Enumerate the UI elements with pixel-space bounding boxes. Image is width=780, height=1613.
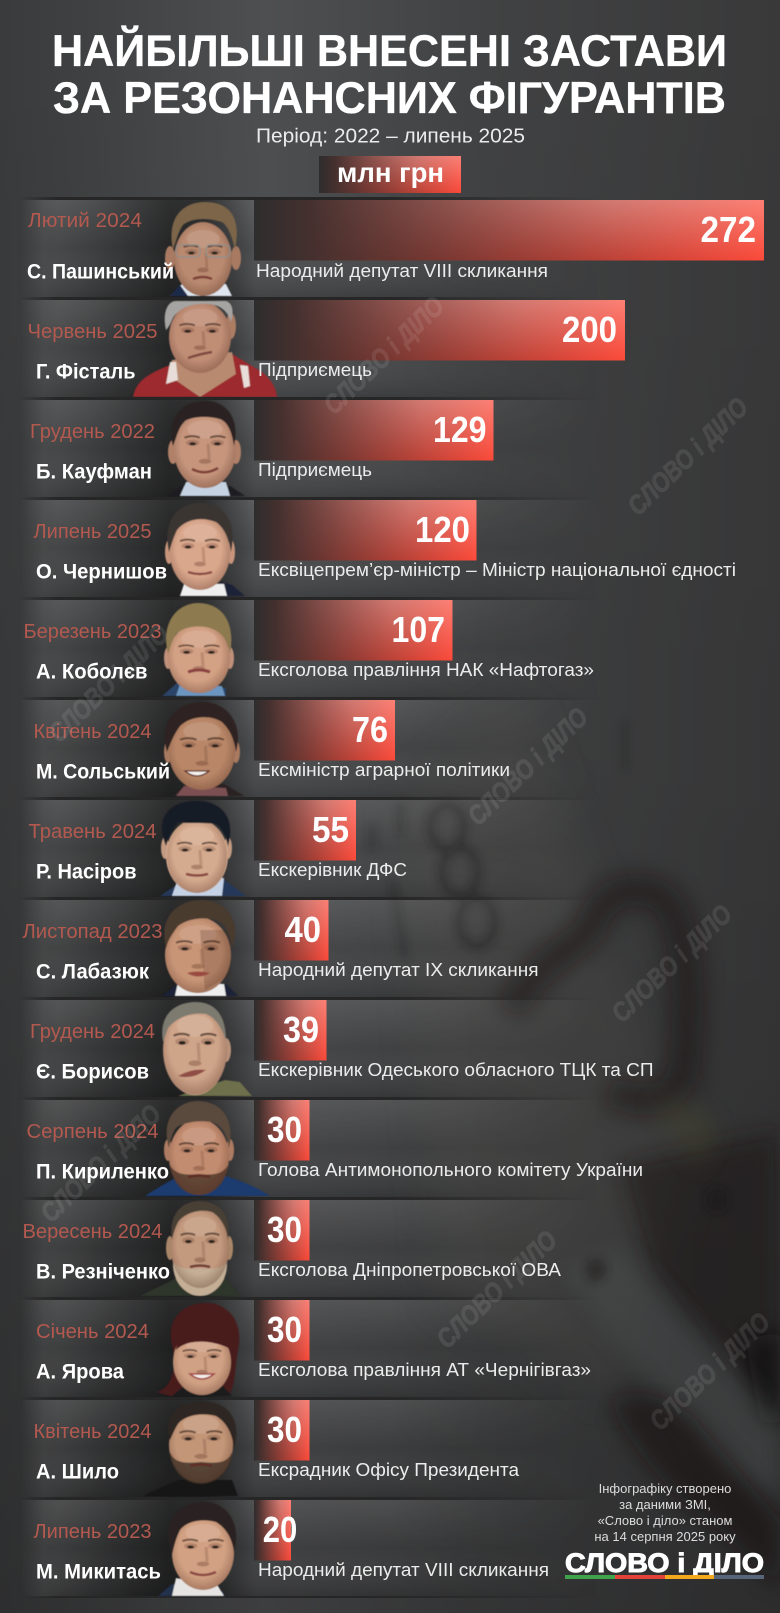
position: Ексміністр аграрної політики	[258, 759, 510, 780]
name: Р. Насіров	[36, 860, 137, 884]
watermarks: СЛОВО і ДІЛО: СЛОВО і ДІЛО	[622, 392, 754, 521]
subtitle: period: Період: 2022 – липень 2025	[256, 126, 525, 148]
value: 272	[700, 209, 756, 250]
bar	[254, 1100, 310, 1160]
date: Січень 2024	[36, 1321, 149, 1343]
bar	[254, 1000, 326, 1060]
date: Вересень 2024	[22, 1221, 162, 1243]
bar	[254, 500, 476, 560]
row: Коболєв 107	[25, 597, 594, 697]
row: Борисов 39	[28, 997, 652, 1097]
position: Екскерівник ДФС	[258, 859, 407, 880]
portrait: Ярова	[156, 1303, 239, 1396]
source note: «Слово і діло» станом	[598, 1513, 732, 1528]
row: Резніченко 30	[24, 1197, 561, 1297]
date: Квітень 2024	[34, 721, 152, 743]
row: Пашинський 272	[0, 197, 780, 297]
position: Екскерівник Одеського обласного ТЦК та СП	[258, 1059, 654, 1080]
position: Підприємець	[258, 459, 372, 480]
position: Народний депутат VIII скликання	[258, 1559, 549, 1580]
portrait: Резніченко	[140, 1201, 242, 1296]
watermarks: СЛОВО і ДІЛО	[35, 291, 776, 1436]
bar	[254, 1300, 310, 1360]
date: Листопад 2023	[22, 921, 162, 943]
bar	[254, 600, 452, 660]
title	[52, 25, 727, 123]
bar	[254, 1200, 310, 1260]
portrait: Микитась	[158, 1502, 236, 1596]
name: П. Кириленко	[36, 1160, 169, 1184]
portrait: Чернишов	[165, 503, 245, 596]
bar	[254, 1400, 310, 1460]
source note: за даними ЗМІ,	[619, 1497, 711, 1512]
name: А. Ярова	[36, 1360, 124, 1384]
portrait: Шило	[144, 1402, 238, 1496]
name: Є. Борисов	[36, 1060, 149, 1084]
position: Голова Антимонопольного комітету України	[258, 1159, 643, 1180]
value: 40	[284, 909, 321, 950]
unit label: млн грн	[319, 156, 461, 193]
name: М. Сольський	[36, 760, 170, 784]
row: Кауфман 129	[28, 397, 538, 497]
bar	[254, 800, 356, 860]
portrait: Фісталь	[133, 301, 277, 397]
date: Квітень 2024	[34, 1421, 152, 1443]
name: Г. Фісталь	[36, 360, 136, 384]
portrait: Борисов	[162, 1002, 252, 1096]
name: О. Чернишов	[36, 560, 167, 584]
position: Народний депутат VIII скликання	[256, 260, 548, 281]
source note: Інфографіку створено	[599, 1481, 731, 1496]
date: Травень 2024	[28, 821, 156, 843]
unit label: млн грн: млн грн	[337, 157, 444, 188]
value: 129	[433, 409, 486, 450]
row: Чернишов 120	[0, 497, 780, 597]
watermarks: СЛОВО і ДІЛО: СЛОВО і ДІЛО	[431, 1225, 563, 1354]
value: 30	[267, 1109, 302, 1150]
logo: Слово і діло: СЛОВО і ДІЛО	[565, 1548, 764, 1578]
bar	[254, 900, 328, 960]
portrait: Насіров	[160, 801, 246, 896]
name: Б. Кауфман	[36, 460, 152, 484]
row: Шило 30	[0, 1397, 780, 1497]
watermarks: СЛОВО і ДІЛО: СЛОВО і ДІЛО	[43, 619, 175, 748]
watermarks: СЛОВО і ДІЛО: СЛОВО і ДІЛО	[462, 702, 594, 831]
value: 20	[263, 1509, 297, 1550]
portrait: Кириленко	[145, 1101, 270, 1196]
source note: на 14 серпня 2025 року	[594, 1529, 736, 1544]
bar	[254, 700, 395, 760]
date: Лютий 2024	[28, 210, 142, 232]
position: Народний депутат ІХ скликання	[258, 959, 538, 980]
date: Грудень 2022	[30, 421, 155, 443]
date: Грудень 2024	[30, 1021, 155, 1043]
portrait: Лабазюк	[162, 900, 238, 996]
value: 30	[267, 1409, 302, 1450]
portrait: Коболєв	[162, 603, 234, 696]
portrait: Сольський	[164, 702, 244, 796]
name: А. Шило	[36, 1460, 119, 1484]
bar	[254, 400, 494, 460]
value: 120	[415, 509, 470, 550]
date: Липень 2025	[34, 521, 152, 543]
name: В. Резніченко	[36, 1260, 170, 1284]
row: Ярова 30	[0, 1297, 780, 1397]
date: Березень 2023	[24, 621, 162, 643]
value: 76	[352, 709, 388, 750]
value: 107	[392, 609, 445, 650]
position: Ексрадник Офісу Президента	[258, 1459, 520, 1480]
row: Лабазюк 40	[22, 897, 543, 997]
row: Микитась 20	[0, 1497, 780, 1598]
date: Червень 2025	[28, 321, 158, 343]
position: Ексголова правління НАК «Нафтогаз»	[258, 659, 594, 680]
position: Підприємець	[258, 359, 372, 380]
row: Кириленко 30	[28, 1097, 642, 1197]
date: Липень 2023	[34, 1521, 152, 1543]
value: 30	[267, 1309, 302, 1350]
value: 30	[267, 1209, 302, 1250]
watermarks: СЛОВО і ДІЛО: СЛОВО і ДІЛО	[35, 1099, 167, 1228]
portrait: Кауфман	[167, 401, 245, 496]
source note	[594, 1481, 736, 1544]
value: 39	[283, 1009, 319, 1050]
value: 200	[562, 309, 617, 350]
position: Ексголова правління АТ «Чернігівгаз»	[258, 1359, 591, 1380]
position: Ексвіцепрем’єр-міністр – Міністр національної єдності	[258, 559, 736, 580]
value: 55	[312, 809, 349, 850]
row: Насіров 55	[28, 797, 543, 897]
bar	[254, 1500, 291, 1560]
name: М. Микитась	[36, 1560, 161, 1584]
name: С. Лабазюк	[36, 960, 149, 984]
position: Ексголова Дніпропетровської ОВА	[258, 1259, 562, 1280]
portrait: Пашинський	[165, 202, 241, 296]
name: А. Коболєв	[36, 660, 148, 684]
name: С. Пашинський	[27, 260, 174, 284]
row: Сольський 76	[28, 697, 533, 797]
bar	[254, 300, 625, 360]
title: ЗА РЕЗОНАНСНИХ ФІГУРАНТІВ	[53, 74, 726, 123]
date: Серпень 2024	[26, 1121, 158, 1143]
row: Фісталь 200	[28, 297, 625, 397]
watermarks: СЛОВО і ДІЛО: СЛОВО і ДІЛО	[606, 899, 738, 1028]
watermarks: СЛОВО і ДІЛО: СЛОВО і ДІЛО	[318, 291, 450, 420]
bar	[254, 200, 764, 260]
title: НАЙБІЛЬШІ ВНЕСЕНІ ЗАСТАВИ	[52, 25, 727, 76]
